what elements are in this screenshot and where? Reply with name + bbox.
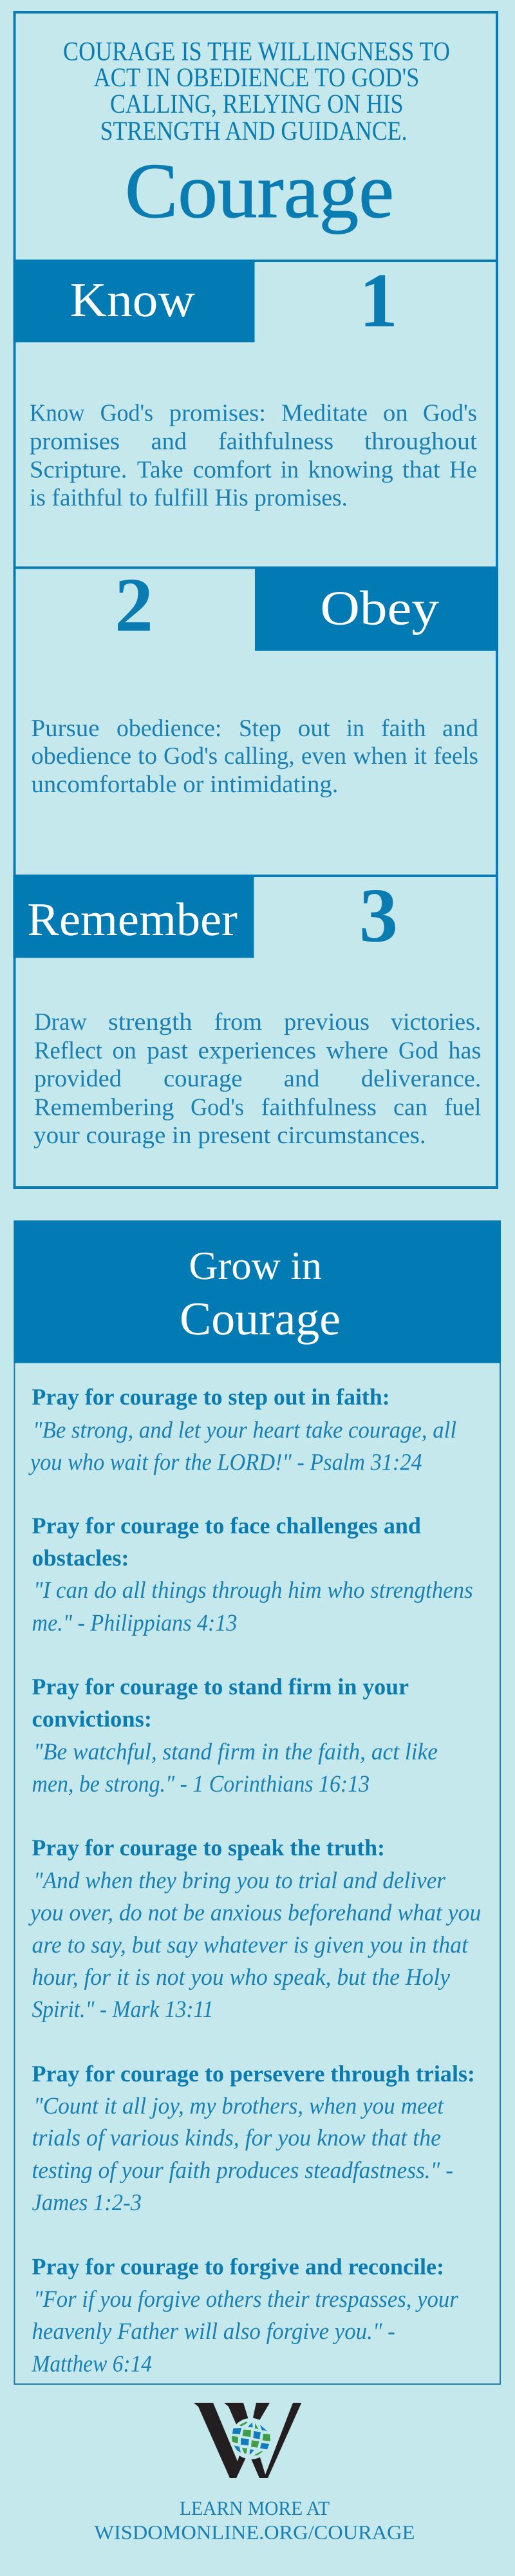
step 1 text: on — [383, 400, 408, 427]
step 1 text: Scripture. — [30, 456, 127, 483]
divider and step 2 heading: Obey — [320, 582, 439, 636]
step 1 text: that — [402, 456, 440, 483]
step 3 text: strength — [108, 1009, 192, 1036]
footer text: LEARN MORE AT — [180, 2497, 330, 2519]
number 1: 1 — [359, 257, 398, 343]
step 3 text: Reflect — [34, 1037, 102, 1064]
step 1 text: He — [449, 456, 477, 483]
prayer 1: "Be strong, and let your heart take courage, all — [33, 1417, 456, 1444]
step 1 text — [30, 400, 477, 511]
footer text: WISDOMONLINE.ORG/COURAGE — [94, 2521, 415, 2544]
step 1 text: Know — [30, 400, 85, 427]
step 1 text: faithfulness — [218, 428, 333, 455]
prayer 6: heavenly Father will also forgive you." - — [32, 2318, 395, 2345]
prayer 4: hour, for it is not you who speak, but the Holy — [32, 1964, 451, 1991]
step 2 text: it — [414, 743, 427, 770]
step 2 text: obedience — [31, 743, 131, 770]
step 3 text: experiences — [198, 1037, 316, 1064]
prayer 4: Spirit." - Mark 13:11 — [32, 1996, 214, 2023]
step 3 text: from — [214, 1009, 262, 1036]
title: Courage — [125, 147, 394, 234]
step 1 text: God's — [100, 400, 153, 427]
number 3: 3 — [359, 873, 398, 958]
step 3 text: and — [284, 1065, 319, 1092]
step 2 text: feels — [434, 743, 478, 770]
step 2 text: in — [346, 715, 364, 742]
step 1 text: God's — [423, 400, 477, 427]
intro text: CALLING, RELYING ON HIS — [110, 90, 403, 119]
step 1 text: throughout — [364, 428, 477, 455]
step 2 text: out — [298, 715, 330, 742]
grow heading band: Courage — [180, 1293, 341, 1345]
prayer 3: "Be watchful, stand firm in the faith, act like — [33, 1739, 438, 1765]
step 3 text: faithfulness — [261, 1094, 377, 1121]
footer text — [94, 2497, 415, 2544]
prayer 5: James 1:2-3 — [32, 2190, 142, 2216]
step 1 text: and — [151, 428, 187, 455]
prayer 2: Pray for courage to face challenges and — [32, 1513, 421, 1539]
step 2 text: faith — [381, 715, 426, 742]
prayer 3 — [32, 1674, 438, 1797]
prayer 3: Pray for courage to stand firm in your — [32, 1674, 409, 1700]
prayer 4: are to say, but say whatever is given you in that — [32, 1932, 469, 1958]
step 1 text: is faithful to fulfill His promises. — [30, 484, 348, 511]
intro text: STRENGTH AND GUIDANCE. — [100, 117, 407, 146]
prayer 1: you who wait for the LORD!" - Psalm 31:24 — [28, 1450, 422, 1476]
step 1 text: in — [281, 456, 299, 483]
step 1 text: promises: — [169, 400, 266, 427]
prayer 3: men, be strong." - 1 Corinthians 16:13 — [32, 1771, 370, 1797]
step 3 text: previous — [284, 1009, 370, 1036]
step 2 text: God's — [164, 743, 218, 770]
prayer 6: "For if you forgive others their trespasses, your — [33, 2286, 458, 2313]
step 2 text: obedience: — [117, 715, 221, 742]
prayer 2: me." - Philippians 4:13 — [32, 1610, 237, 1636]
step 3 text: courage — [164, 1065, 242, 1092]
step 2 text: Pursue — [31, 715, 100, 742]
icon: wisdom online logo — [194, 2403, 301, 2478]
prayer 6 — [32, 2254, 458, 2378]
step 3 text: fuel — [444, 1094, 481, 1121]
icon: globe — [232, 2421, 270, 2456]
step 3 text: God — [398, 1037, 438, 1064]
prayer 4 — [28, 1835, 481, 2023]
step 1 text: promises — [30, 428, 120, 455]
grow heading band: Grow in — [189, 1244, 322, 1288]
prayer 5 — [32, 2061, 475, 2216]
step 3 text: your courage in present circumstances. — [33, 1122, 426, 1149]
step 3 text: can — [393, 1094, 427, 1121]
step 1 text: comfort — [193, 456, 272, 483]
prayer 5: testing of your faith produces steadfastness." - — [32, 2157, 453, 2184]
step 3 text: has — [448, 1037, 481, 1064]
prayer 1: Pray for courage to step out in faith: — [32, 1384, 390, 1410]
prayer 5: "Count it all joy, my brothers, when you meet — [33, 2093, 445, 2119]
step 1 text: knowing — [308, 456, 393, 483]
step 3 text: victories. — [391, 1009, 481, 1036]
step 2 text: to — [138, 743, 157, 770]
prayer 3: convictions: — [32, 1706, 152, 1732]
prayer 4: "And when they bring you to trial and deliver — [33, 1868, 446, 1894]
step 3 text: God's — [191, 1094, 244, 1121]
prayer 6: Pray for courage to forgive and reconcile: — [32, 2254, 444, 2280]
prayer 6: Matthew 6:14 — [32, 2351, 152, 2378]
intro text: COURAGE IS THE WILLINGNESS TO — [63, 37, 450, 67]
step 1 text: Meditate — [281, 400, 368, 427]
step 2 text: Step — [239, 715, 281, 742]
prayer 2 — [32, 1513, 473, 1636]
step 2 text: uncomfortable or intimidating. — [31, 771, 339, 798]
grow heading band — [14, 1221, 501, 1363]
divider and step 3 heading: Remember — [27, 893, 238, 945]
intro text — [63, 37, 450, 146]
number 2: 2 — [115, 562, 153, 648]
step 2 text: when — [353, 743, 407, 770]
prayer 4: you over, do not be anxious beforehand what you — [28, 1900, 481, 1926]
divider and step 3 heading — [13, 875, 497, 958]
prayer 5: trials of various kinds, for you know that the — [32, 2125, 441, 2151]
prayer 2: obstacles: — [32, 1545, 129, 1571]
step 3 text: where — [326, 1037, 388, 1064]
step 2 text: and — [442, 715, 478, 742]
divider and step 1 heading: Know — [70, 273, 195, 327]
step 3 text: Draw — [34, 1009, 88, 1036]
step 3 text: on — [112, 1037, 136, 1064]
step 1 text: Take — [137, 456, 183, 483]
divider and step 1 heading — [14, 260, 497, 342]
prayer 1 — [28, 1384, 456, 1476]
step 3 text: deliverance. — [361, 1065, 481, 1092]
step 2 text: even — [301, 743, 346, 770]
prayer 4: Pray for courage to speak the truth: — [32, 1835, 385, 1861]
step 3 text: Remembering — [34, 1094, 174, 1121]
step 2 text: calling, — [224, 743, 295, 770]
step 3 text: provided — [34, 1065, 122, 1092]
step 3 text — [33, 1009, 481, 1149]
step 2 text — [31, 715, 478, 798]
prayer 2: "I can do all things through him who strengthens — [33, 1577, 473, 1604]
step 3 text: past — [147, 1037, 188, 1064]
prayer 5: Pray for courage to persevere through trials: — [32, 2061, 475, 2087]
divider and step 2 heading — [14, 567, 498, 651]
intro text: ACT IN OBEDIENCE TO GOD'S — [93, 63, 419, 93]
panel: grow in courage — [14, 1221, 501, 2384]
panel: three steps — [13, 12, 498, 1188]
